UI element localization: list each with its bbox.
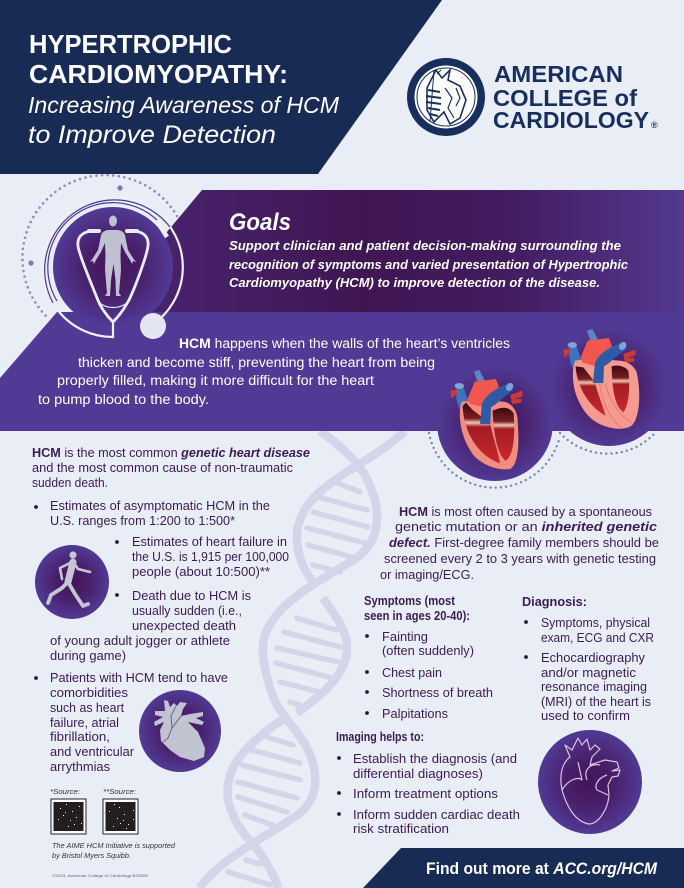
bullet: comorbidities: such as heart xyxy=(50,701,125,715)
list: imaging helps to: Establish the diagnosis (and xyxy=(353,752,517,766)
bullet: heart failure estimate xyxy=(115,535,289,579)
header banner xyxy=(0,0,442,174)
text: HCM description: properly filled, making it more difficult for the heart xyxy=(57,373,374,388)
list: symptoms: Shortness of breath xyxy=(382,686,493,700)
bullet: sudden death: of young adult jogger or athlete xyxy=(50,634,230,648)
text: genetic mutation: defect. First-degree family members should be xyxy=(389,536,659,550)
list: imaging helps to xyxy=(336,730,520,836)
logo wordmark: COLLEGE of xyxy=(493,85,637,111)
bullet: sudden death: usually sudden (i.e., xyxy=(132,604,242,618)
goals text: recognition of symptoms and varied presentation of Hypertrophic xyxy=(229,257,629,272)
text: genetic mutation: or imaging/ECG. xyxy=(380,568,474,582)
subtitle: Increasing Awareness of HCM xyxy=(28,92,339,118)
QR code 1 xyxy=(51,799,86,834)
panel: HCM description band xyxy=(0,312,684,431)
bullet: sudden death: Death due to HCM is xyxy=(132,589,251,603)
sponsor note xyxy=(52,841,176,860)
symptoms heading: Symptoms (most xyxy=(364,594,456,608)
bullet: comorbidities: Patients with HCM tend to have xyxy=(50,671,228,685)
heart illustration xyxy=(563,329,639,429)
list: imaging helps to: Inform sudden cardiac death xyxy=(353,808,520,822)
icon: runner xyxy=(35,545,109,619)
icon: heart outline xyxy=(538,730,642,834)
disc xyxy=(550,328,668,446)
bullet: heart failure estimate: the U.S. is 1,915 per 100,000 xyxy=(132,550,289,564)
source label 2: **Source: xyxy=(103,787,136,796)
diagnosis heading: Diagnosis: xyxy=(522,595,587,609)
bullet: comorbidities: arrythmias xyxy=(50,760,110,774)
list: diagnosis xyxy=(522,595,654,723)
subtitle line 2: to Improve Detection xyxy=(28,121,276,149)
text: most common genetic heart disease: and the most common cause of non-traumatic xyxy=(32,461,293,475)
bullet: asymptomatic estimate: U.S. ranges from 1:200 to 1:500* xyxy=(50,514,235,528)
rings xyxy=(43,197,183,337)
QR code 2 xyxy=(103,799,138,834)
list: diagnosis: used to confirm xyxy=(541,709,630,723)
footer call to action: Find out more at ACC.org/HCM xyxy=(426,860,658,878)
panel: goals band xyxy=(100,190,684,312)
text: HCM description xyxy=(38,336,510,407)
list: diagnosis: and/or magnetic xyxy=(541,666,636,680)
text: most common genetic heart disease: sudden death. xyxy=(32,476,108,490)
text: most common genetic heart disease: HCM is the most common genetic heart disease xyxy=(32,446,310,460)
text: genetic mutation xyxy=(380,505,659,582)
stethoscope xyxy=(78,231,148,322)
DNA helix background xyxy=(200,431,405,888)
title: HYPERTROPHIC xyxy=(29,29,232,59)
goals text: Cardiomyopathy (HCM) to improve detection of the disease. xyxy=(229,275,600,290)
text: genetic mutation: genetic mutation or an inherited genetic xyxy=(395,520,657,534)
goals text xyxy=(229,238,629,290)
logo seal xyxy=(407,58,485,136)
dotted ring xyxy=(22,175,177,317)
list: diagnosis: exam, ECG and CXR xyxy=(541,631,654,645)
list: symptoms: (often suddenly) xyxy=(382,644,474,658)
human figure xyxy=(90,216,136,296)
bullet: sudden death xyxy=(50,589,251,663)
bullet: comorbidities: comorbidities xyxy=(50,686,128,700)
title line 2: CARDIOMYOPATHY: xyxy=(29,59,288,89)
text: genetic mutation: screened every 2 to 3 years with genetic testing xyxy=(384,552,656,566)
text: genetic mutation: HCM is most often caused by a spontaneous xyxy=(399,505,652,519)
list: symptoms: Chest pain xyxy=(382,666,442,680)
list: imaging helps to: risk stratification xyxy=(353,822,449,836)
bullet: heart failure estimate: people (about 10:500)** xyxy=(132,565,270,579)
logo wordmark: AMERICAN xyxy=(494,61,623,87)
dotted arc xyxy=(560,433,655,454)
bullet: sudden death: unexpected death xyxy=(132,619,236,633)
text: most common genetic heart disease xyxy=(32,446,310,490)
icon: thickened heart xyxy=(550,328,668,454)
symptoms heading xyxy=(364,594,470,623)
medallion disc xyxy=(53,207,173,327)
icon: stethoscope medallion xyxy=(22,175,183,339)
logo: American College of Cardiology xyxy=(407,58,658,136)
bullet: heart failure estimate: Estimates of heart failure in xyxy=(132,535,287,549)
symptoms heading: seen in ages 20-40): xyxy=(364,609,470,623)
list: imaging helps to: Inform treatment options xyxy=(353,787,498,801)
sponsor note: by Bristol Myers Squibb. xyxy=(52,851,131,860)
list: diagnosis: (MRI) of the heart is xyxy=(541,695,651,709)
goals heading: Goals xyxy=(229,209,291,236)
bullet: comorbidities xyxy=(34,671,228,774)
list: imaging helps to: differential diagnoses) xyxy=(353,767,483,781)
sponsor note: The AIME HCM Initiative is supported xyxy=(52,841,176,850)
logo wordmark: CARDIOLOGY xyxy=(493,107,649,133)
text: HCM description: HCM happens when the walls of the heart’s ventricles xyxy=(179,336,510,351)
list: symptoms xyxy=(364,594,493,721)
sources with QR codes xyxy=(50,787,176,878)
list: symptoms: Palpitations xyxy=(382,707,448,721)
icon: normal heart xyxy=(429,365,559,488)
bullet: asymptomatic estimate xyxy=(34,499,270,528)
source label 1: *Source: xyxy=(50,787,80,796)
text: HCM description: thicken and become stiff, preventing the heart from being xyxy=(78,355,435,370)
logo wordmark: ® xyxy=(651,120,658,130)
bullet: comorbidities: and ventricular xyxy=(50,745,134,759)
bullet: comorbidities: failure, atrial xyxy=(50,716,119,730)
imaging heading: Imaging helps to: xyxy=(336,730,424,744)
text: HCM description: to pump blood to the body. xyxy=(38,392,209,407)
copyright: ©2023, American College of Cardiology B23599 xyxy=(52,873,149,878)
icon: grey heart xyxy=(139,690,221,772)
dotted arc xyxy=(429,433,559,488)
chest piece xyxy=(140,313,166,339)
bullet: sudden death: during game) xyxy=(50,649,126,663)
goals text: Support clinician and patient decision-making surrounding the xyxy=(229,238,621,253)
disc xyxy=(437,365,553,481)
footer banner xyxy=(363,848,684,888)
list: diagnosis: Symptoms, physical xyxy=(541,616,650,630)
logo wordmark xyxy=(493,61,658,133)
bullet: comorbidities: fibrillation, xyxy=(50,730,110,744)
heart illustration xyxy=(450,370,523,469)
list: diagnosis: Echocardiography xyxy=(541,651,646,665)
list: symptoms: Fainting xyxy=(382,630,428,644)
list: diagnosis: resonance imaging xyxy=(541,680,647,694)
bullet: asymptomatic estimate: Estimates of asymptomatic HCM in the xyxy=(50,499,270,513)
